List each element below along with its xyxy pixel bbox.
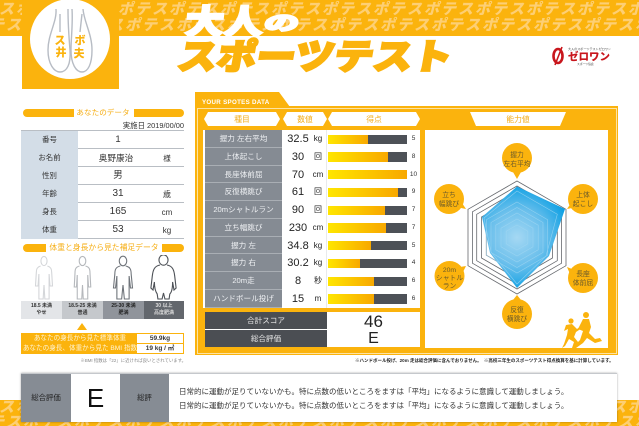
results table: 20mシャトルラン	[213, 205, 274, 214]
column headings	[204, 112, 420, 126]
results table: 7	[412, 206, 415, 213]
total score: 総合評価	[251, 334, 281, 343]
callout: standard weight and BMI: あなたの身長、体重から見た BMI 指数	[23, 344, 137, 352]
callout: standard weight and BMI: 59.9kg	[150, 335, 170, 342]
data table: 歳	[163, 190, 171, 199]
results table: ハンドボール投げ	[213, 294, 274, 303]
BMI category scale: 肥満	[118, 310, 128, 316]
results table: 上体起こし	[225, 152, 262, 161]
panel: your data	[21, 108, 184, 239]
logo: ゼロワン: スポーツ協会	[577, 62, 594, 66]
results table: 立ち幅跳び	[225, 223, 262, 232]
data table: 身長	[42, 207, 57, 216]
results table: 5	[412, 135, 415, 142]
bottom pattern band	[0, 400, 639, 426]
BMI category scale: 普通	[77, 310, 88, 316]
results table: 15	[292, 293, 304, 305]
results table: 30	[292, 151, 304, 163]
heading: your data: あなたのデータ	[76, 108, 130, 117]
radar chart panel	[425, 130, 608, 348]
data table: 番号	[42, 135, 57, 144]
results table: 8	[412, 153, 415, 160]
callout: standard weight and BMI	[21, 333, 184, 354]
results table: 反復横跳び	[225, 187, 262, 196]
heading: supplementary data	[23, 243, 184, 252]
data table: 男	[113, 170, 123, 181]
panel: overall assessment: E	[87, 383, 104, 413]
tab: your spotes data	[195, 92, 290, 106]
overall grade	[21, 374, 71, 422]
radar labels: 横跳び	[507, 314, 527, 323]
total score: E	[368, 330, 379, 347]
results table: 握力 左右平均	[220, 134, 267, 143]
results table: cm	[313, 223, 323, 232]
data table: 様	[163, 154, 171, 163]
data table: 165	[110, 206, 126, 217]
results table: 4	[412, 259, 415, 266]
column headings: 得点	[366, 114, 382, 124]
radar labels: 20m	[443, 267, 456, 274]
heading: supplementary data: 体重と身長から見た補足データ	[49, 243, 159, 252]
review text	[179, 387, 568, 410]
results table: 34.8	[287, 240, 309, 252]
results table: 10	[410, 170, 417, 178]
data table: 53	[112, 224, 124, 235]
results table: 61	[292, 186, 304, 198]
data table: お名前	[38, 153, 61, 162]
results table: kg	[314, 134, 322, 143]
data table: kg	[163, 226, 171, 235]
radar labels: ラン	[443, 282, 456, 290]
data table: 31	[112, 188, 124, 199]
tab: your spotes data: YOUR SPOTES DATA	[202, 99, 270, 106]
top pattern band	[0, 0, 639, 36]
radar labels: 幅跳び	[439, 199, 459, 208]
results table: 90	[292, 204, 304, 216]
BMI category scale: 18.5 未満	[31, 303, 52, 309]
radar grid	[468, 181, 566, 294]
results table: 9	[412, 188, 415, 195]
review label: 総評	[137, 393, 152, 402]
data table: cm	[162, 208, 172, 217]
BMI category scale: 18.5-25 未満	[68, 303, 97, 309]
icon: shoes emblem: ボ	[74, 33, 86, 47]
results table: 7	[412, 224, 415, 231]
title: の	[262, 7, 302, 36]
heading: your data	[23, 108, 184, 117]
results table: 30.2	[287, 257, 309, 269]
review text: 日常的に運動が足りていないかも。特に点数の低いところをますは「平均」になるように意識して運動しましょう。	[179, 387, 568, 396]
BMI category scale	[21, 301, 184, 319]
radar labels: 上体	[576, 190, 590, 199]
results table: 秒	[314, 276, 322, 285]
icon: shoes emblem: 夫	[74, 46, 84, 60]
footnotes: ※ハンドボール投げ、20m 走は総合評価に含んでおりません。 ※高校三年生のスポーツテスト得点換算を基に計算しています。	[355, 358, 614, 363]
radar labels	[434, 143, 598, 329]
total score: 合計スコア	[247, 316, 285, 325]
date: 実施日 2019/00/00	[123, 121, 184, 130]
column heading: 能力値	[470, 112, 566, 126]
results table: 6	[412, 295, 415, 302]
data table: 年齢	[42, 189, 57, 198]
results table: 6	[412, 277, 415, 284]
icon: shoes emblem	[22, 0, 119, 89]
radar data polygon	[482, 186, 565, 288]
radar labels: 握力	[510, 150, 524, 159]
column heading: 能力値: 能力値	[506, 114, 530, 124]
icon: shoes emblem: ス	[54, 35, 66, 47]
data table: 1	[115, 134, 121, 145]
BMI category scale: 25-30 未満	[111, 303, 136, 309]
radar labels: 体前屈	[573, 278, 593, 287]
results table: 回	[314, 152, 322, 161]
results table: 回	[314, 205, 322, 214]
results table: kg	[314, 258, 322, 267]
results table: kg	[314, 240, 322, 250]
total score	[205, 312, 420, 347]
BMI note: ※BMI 指数は「22」に近ければ良いとされています。	[80, 358, 186, 363]
logo: ゼロワン: 大人のスポーツテストゼロワン	[568, 47, 611, 51]
overall grade: 総合評価	[31, 393, 61, 402]
BMI category scale: 高度肥満	[154, 310, 174, 316]
BMI category scale: 30 以上	[156, 303, 172, 309]
results table	[203, 130, 420, 308]
results table: m	[315, 294, 321, 303]
callout: standard weight and BMI: 19 kg / ㎡	[146, 345, 174, 352]
data table: 体重	[42, 225, 57, 234]
BMI category scale: やせ	[36, 310, 46, 316]
total score: 46	[364, 312, 383, 331]
panel: sports data	[195, 92, 618, 355]
radar labels: 左右平均	[503, 159, 531, 168]
radar labels: 立ち	[442, 190, 456, 199]
results table: 5	[412, 242, 415, 248]
data table	[21, 130, 184, 239]
results table: 32.5	[287, 133, 309, 145]
logo: ゼロワン: ゼロワン	[568, 50, 610, 63]
callout: standard weight and BMI: あなたの身長から見た標準体重	[34, 335, 126, 342]
body figures	[35, 255, 177, 300]
panel: overall assessment	[21, 373, 617, 422]
review text: 日常的に運動が足りていないかも。特に点数の低いところをますは「平均」になるように意識して運動しましょう。	[179, 401, 568, 410]
data table: 奥野康治	[99, 153, 133, 163]
results table: 230	[289, 222, 307, 234]
icon: shoes emblem: 井	[56, 45, 66, 59]
results table: cm	[313, 170, 323, 178]
results table: 20m走	[232, 276, 255, 285]
radar labels: シャトル	[436, 275, 463, 282]
radar labels: 反復	[510, 305, 524, 314]
results table: 握力 右	[231, 258, 256, 267]
title	[175, 0, 457, 76]
arrow: current BMI marker	[77, 323, 87, 330]
radar labels: 長座	[576, 270, 590, 278]
radar labels: 起こし	[573, 200, 593, 208]
review label	[120, 374, 169, 422]
results table: 握力 左	[231, 240, 256, 250]
results table: 8	[295, 275, 301, 287]
results table: 長座体前屈	[225, 170, 262, 178]
logo: ゼロワン	[552, 46, 611, 66]
results table: 回	[314, 187, 322, 196]
data table: 性別	[42, 171, 57, 180]
results table: 70	[292, 168, 304, 180]
column headings: 種目	[234, 114, 250, 124]
column headings: 数値	[297, 114, 313, 124]
icon: runners	[562, 312, 602, 348]
